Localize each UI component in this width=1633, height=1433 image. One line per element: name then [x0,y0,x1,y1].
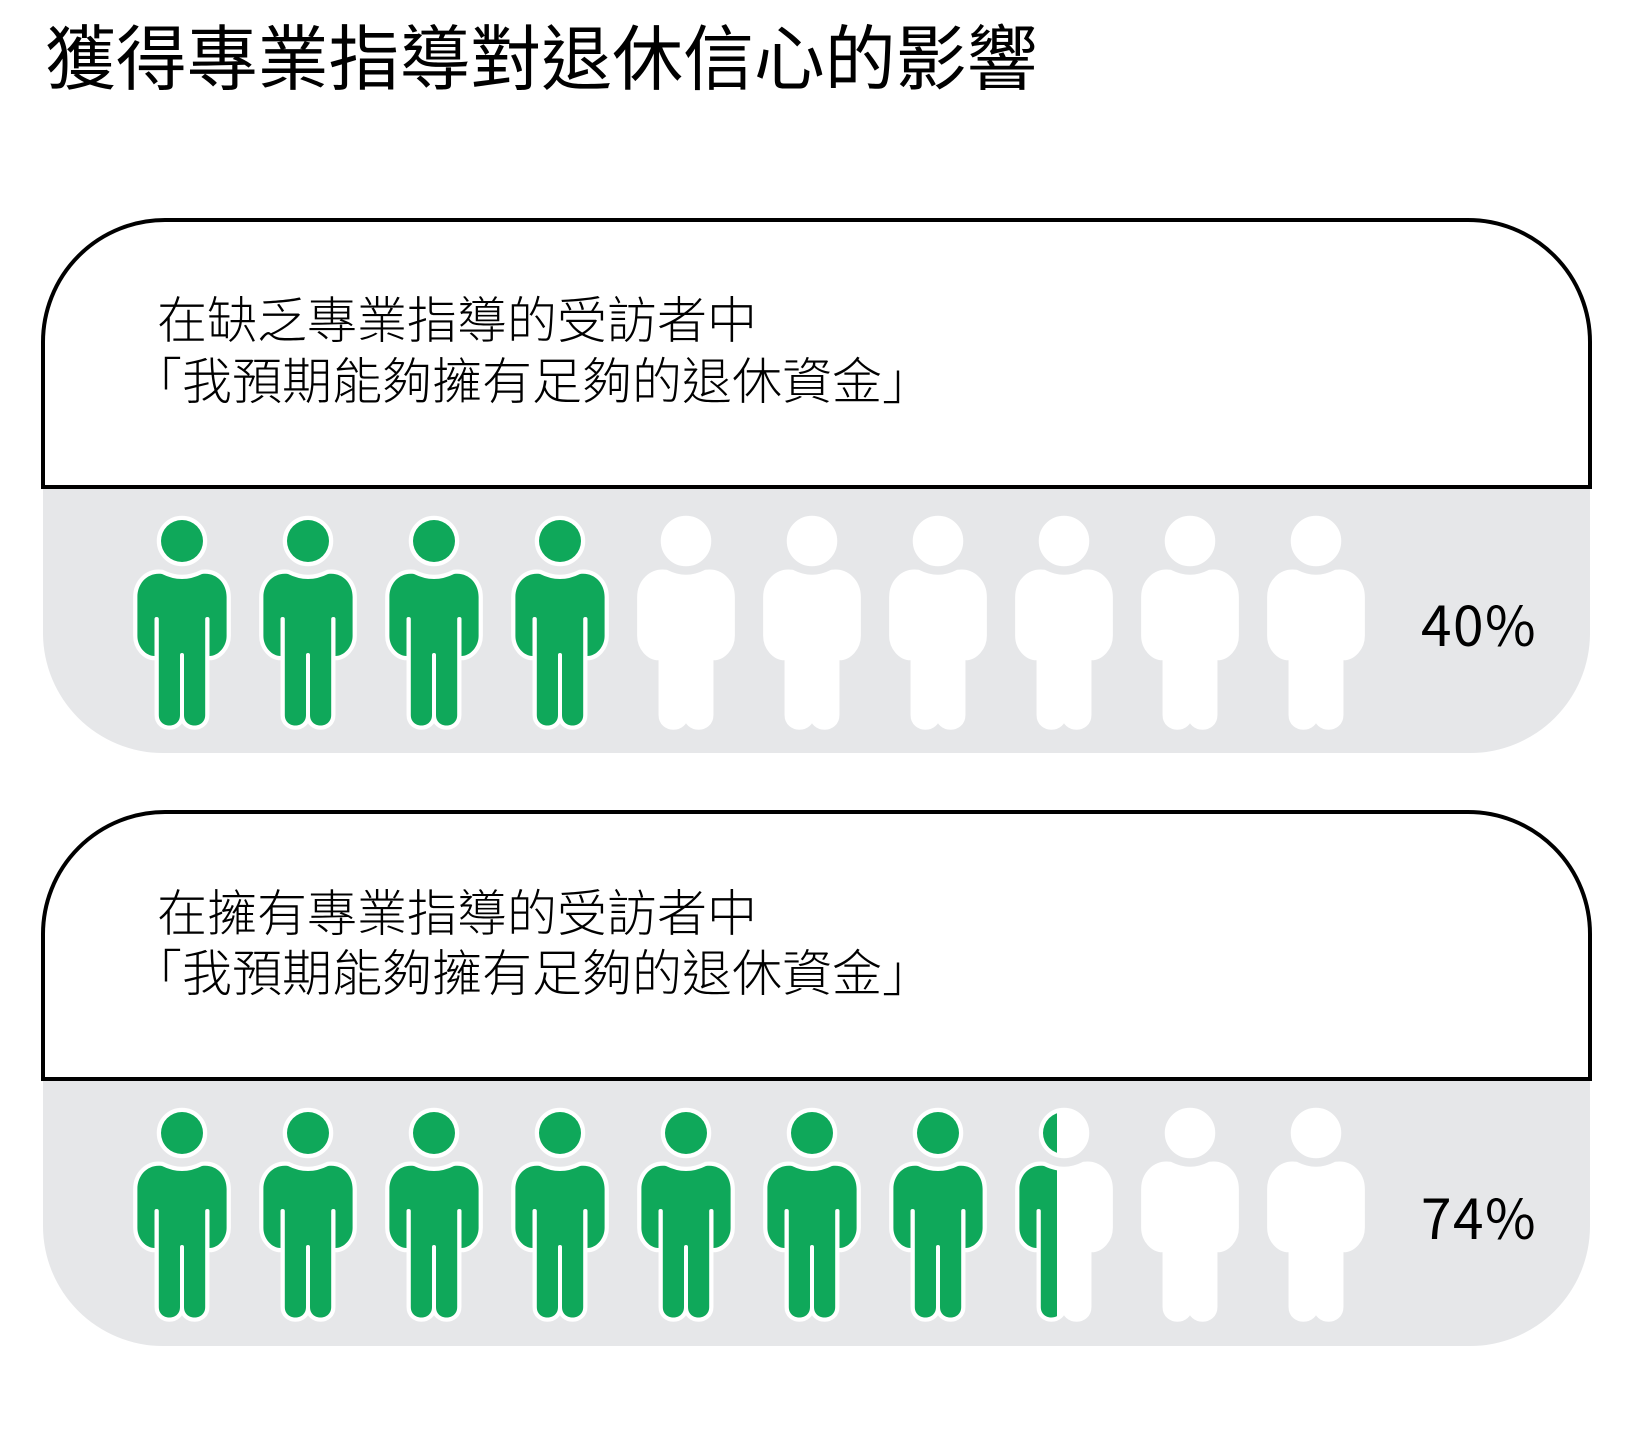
title: 獲得專業指導對退休信心的影響 [45,3,1037,105]
percentage: 74%: 74% [1421,1175,1537,1255]
panel description: 在缺乏專業指導的受訪者中 [157,281,757,353]
panel description: 「我預期能夠擁有足夠的退休資金」 [132,934,932,1006]
panel: with professional guidance [43,812,1590,1346]
panel description: 「我預期能夠擁有足夠的退休資金」 [132,342,932,414]
panel background [43,1079,1590,1346]
panel description: 在擁有專業指導的受訪者中 [157,874,757,946]
panel background [43,487,1590,753]
percentage: 40%: 40% [1421,582,1537,662]
people row: 74% [137,1112,1361,1318]
people row: 40% [137,520,1361,726]
panel header box [43,220,1590,487]
panel: without professional guidance [43,220,1590,753]
panel header box [43,812,1590,1079]
